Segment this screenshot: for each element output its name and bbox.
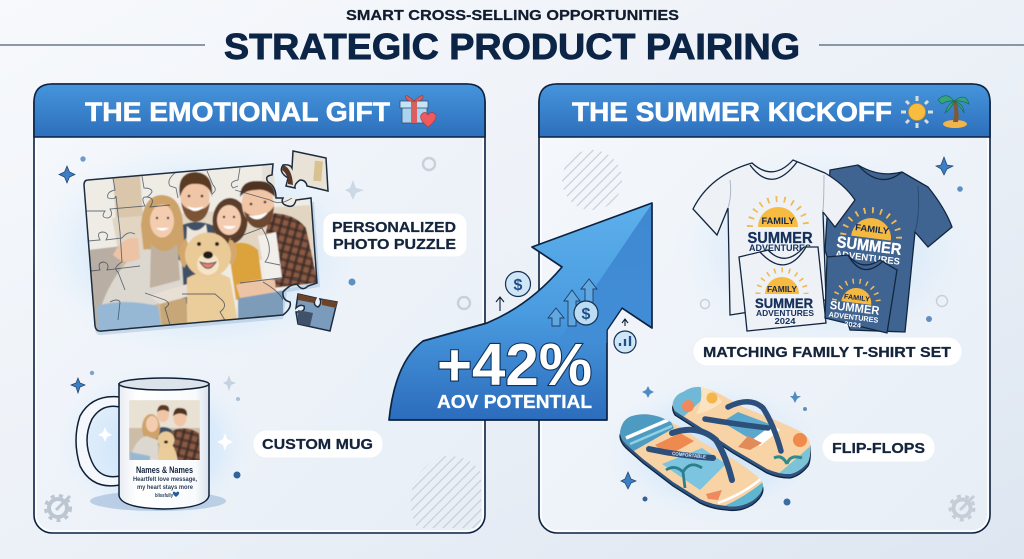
- right flip-flop: [672, 386, 811, 479]
- woman: [141, 195, 185, 254]
- small white tee: 2024: [774, 317, 796, 326]
- label: flip-flops: [822, 433, 935, 462]
- white tee: FAMILY: [762, 216, 794, 226]
- white tee: ADVENTURES: [749, 243, 811, 253]
- sparkles: [217, 433, 233, 451]
- small blue tee: ADVENTURES: [828, 310, 879, 325]
- blue tee: FAMILY: [855, 222, 890, 236]
- icon: bar chart coin: [614, 331, 636, 353]
- label: custom mug: CUSTOM MUG: [262, 436, 373, 453]
- strap text: COMFORTABLE: [672, 451, 707, 461]
- panel: the summer kickoff: [539, 84, 990, 533]
- header text: THE EMOTIONAL GIFT: [85, 97, 390, 127]
- decorative accents: left panel: [59, 156, 470, 479]
- small blue tee: [825, 255, 897, 333]
- jeans: [97, 302, 162, 332]
- icon: sun: [901, 96, 933, 128]
- panel header: [34, 84, 485, 137]
- arrow: small up right: [622, 319, 628, 326]
- mug: Heartfelt love message,: [133, 477, 197, 483]
- header text: THE SUMMER KICKOFF: [572, 97, 892, 127]
- icon: gear bottom right: [950, 496, 974, 520]
- panel: the emotional gift: [34, 84, 485, 533]
- big number: +42%: [437, 332, 592, 398]
- arrow: small up left: [496, 297, 504, 311]
- jigsaw cuts: [85, 168, 300, 325]
- icon: dollar coin on arrow: [574, 301, 598, 325]
- panel header: [539, 84, 990, 137]
- label: personalized photo puzzle: PERSONALIZED: [332, 220, 456, 236]
- right strap: [705, 402, 781, 451]
- small white tee: [739, 247, 826, 331]
- mug body: [119, 384, 209, 509]
- small blue tee: FAMILY: [843, 293, 870, 304]
- white tee: [693, 160, 855, 315]
- blue tee: SUMMER: [836, 234, 903, 259]
- icon: gear bottom left: [46, 496, 70, 520]
- subtitle: SMART CROSS-SELLING OPPORTUNITIES: [346, 7, 679, 24]
- hand on shoulder: [113, 238, 140, 262]
- label: personalized photo puzzle: [323, 213, 467, 257]
- mug photo: [129, 400, 200, 462]
- loose puzzle piece top: [281, 151, 328, 191]
- mug: blissfully: [155, 493, 174, 499]
- label: flip-flops: FLIP-FLOPS: [832, 440, 925, 457]
- man right: [262, 213, 318, 288]
- man arm: [236, 280, 276, 298]
- photo puzzle: [80, 151, 337, 335]
- small blue tee: SUMMER: [829, 298, 881, 318]
- t-shirt set: [693, 160, 952, 333]
- growth arrow: [389, 203, 652, 420]
- arrow caption: AOV POTENTIAL: [437, 391, 592, 412]
- flip-flops: [619, 386, 811, 512]
- label: matching family t-shirt set: [693, 337, 962, 366]
- dog: [187, 272, 238, 326]
- woman hand: [151, 284, 188, 304]
- icon: tiny heart: [173, 492, 179, 497]
- small white tee: SUMMER: [755, 295, 813, 311]
- mug: my heart stays more: [137, 485, 194, 491]
- left flip-flop: [619, 414, 764, 512]
- label: matching family t-shirt set: MATCHING FAMILY T-SHIRT SET: [703, 344, 951, 361]
- blue tee: ADVENTURES: [835, 249, 900, 268]
- label: personalized photo puzzle: PHOTO PUZZLE: [333, 237, 456, 253]
- icon: gift with heart: [400, 96, 436, 127]
- small blue tee: 2024: [844, 321, 862, 330]
- icon: dollar coin on arrow: $: [582, 306, 591, 323]
- girl: [212, 198, 248, 244]
- loose puzzle piece bottom: [296, 294, 337, 331]
- icon: palm island: [938, 96, 969, 128]
- mug: [76, 378, 233, 511]
- title block: [224, 7, 800, 67]
- mug handle: [76, 397, 120, 486]
- small white tee: FAMILY: [767, 285, 798, 294]
- left strap: [649, 430, 732, 480]
- white tee: SUMMER: [748, 230, 813, 247]
- small white tee: ADVENTURES: [756, 308, 814, 318]
- decorative accents: right panel: [621, 157, 963, 506]
- icon: small up arrows: [548, 279, 597, 326]
- blue tee: [825, 165, 952, 332]
- main title: STRATEGIC PRODUCT PAIRING: [224, 26, 800, 67]
- mug text: Names & Names: [136, 465, 193, 475]
- label: custom mug: [253, 430, 383, 458]
- man at back: [178, 221, 216, 304]
- hatch circles: [562, 150, 622, 210]
- decorative glows: [30, 140, 370, 360]
- icon: dollar coin: [506, 272, 530, 296]
- mug shadow: [90, 491, 226, 511]
- icon: dollar coin: $: [514, 277, 523, 294]
